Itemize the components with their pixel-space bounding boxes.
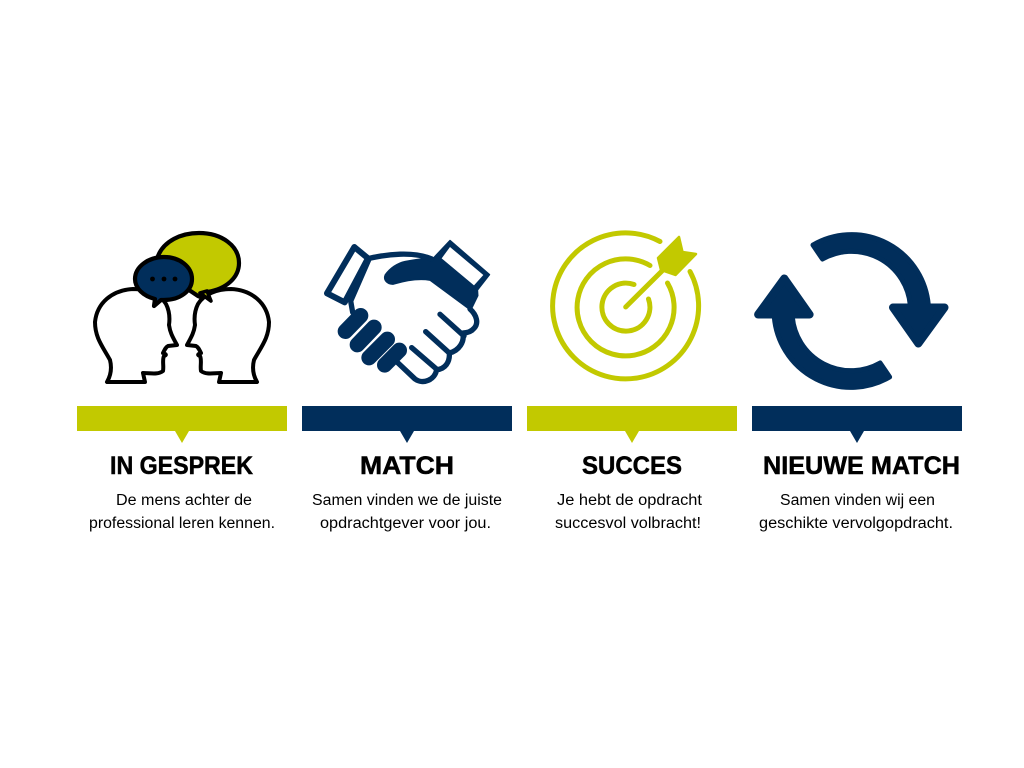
panel: nieuwe match bbox=[752, 235, 962, 532]
icon part: bottom arc arrow bbox=[758, 278, 890, 387]
description: Samen vinden wij een bbox=[780, 492, 935, 509]
label bar bbox=[527, 406, 737, 443]
icon: circular arrows bbox=[758, 235, 944, 387]
icon part: right cuff and dark band bbox=[385, 241, 489, 310]
icon part: finger lines bbox=[412, 314, 464, 369]
icon part: arrow fletching bbox=[658, 237, 696, 275]
panel: match bbox=[302, 241, 512, 532]
description: Je hebt de opdracht bbox=[557, 492, 703, 509]
description bbox=[312, 492, 502, 532]
description: succesvol volbracht! bbox=[555, 515, 701, 532]
icon part: top arc arrow bbox=[813, 235, 944, 344]
description bbox=[89, 492, 275, 532]
heading: IN GESPREK bbox=[110, 452, 253, 480]
description: professional leren kennen. bbox=[89, 515, 275, 532]
icon part: left head bbox=[95, 289, 177, 382]
panel: succes bbox=[527, 233, 737, 532]
icon part: green speech bubble bbox=[158, 233, 239, 301]
icon part: hand outline bbox=[351, 254, 477, 382]
icon part: cuff opening bbox=[442, 247, 483, 285]
icon part: green bubble tail bbox=[200, 291, 211, 301]
label bar bbox=[752, 406, 962, 443]
panel: in gesprek bbox=[77, 233, 287, 532]
icon part: arrow shaft bbox=[626, 271, 662, 307]
description: De mens achter de bbox=[116, 492, 252, 509]
label bar bbox=[77, 406, 287, 443]
icon part: left hand fingers bbox=[345, 316, 399, 365]
label bar bbox=[302, 406, 512, 443]
heading: SUCCES bbox=[582, 452, 682, 480]
description bbox=[759, 492, 953, 532]
description: geschikte vervolgopdracht. bbox=[759, 515, 953, 532]
icon part: ellipsis dots bbox=[150, 277, 177, 281]
heading: MATCH bbox=[360, 452, 454, 480]
icon part: middle ring bbox=[577, 259, 674, 356]
icon: target with arrow bbox=[553, 233, 699, 379]
icon: handshake bbox=[327, 241, 489, 382]
icon part: left cuff bbox=[327, 247, 368, 302]
icon: two heads talking bbox=[95, 233, 269, 382]
description bbox=[555, 492, 703, 532]
icon part: navy speech bubble bbox=[135, 257, 192, 306]
heading: NIEUWE MATCH bbox=[763, 452, 960, 480]
icon part: inner ring bbox=[602, 283, 650, 331]
description: opdrachtgever voor jou. bbox=[320, 515, 491, 532]
description: Samen vinden we de juiste bbox=[312, 492, 502, 509]
icon part: outer ring bbox=[553, 233, 699, 379]
icon part: right head bbox=[187, 289, 269, 382]
